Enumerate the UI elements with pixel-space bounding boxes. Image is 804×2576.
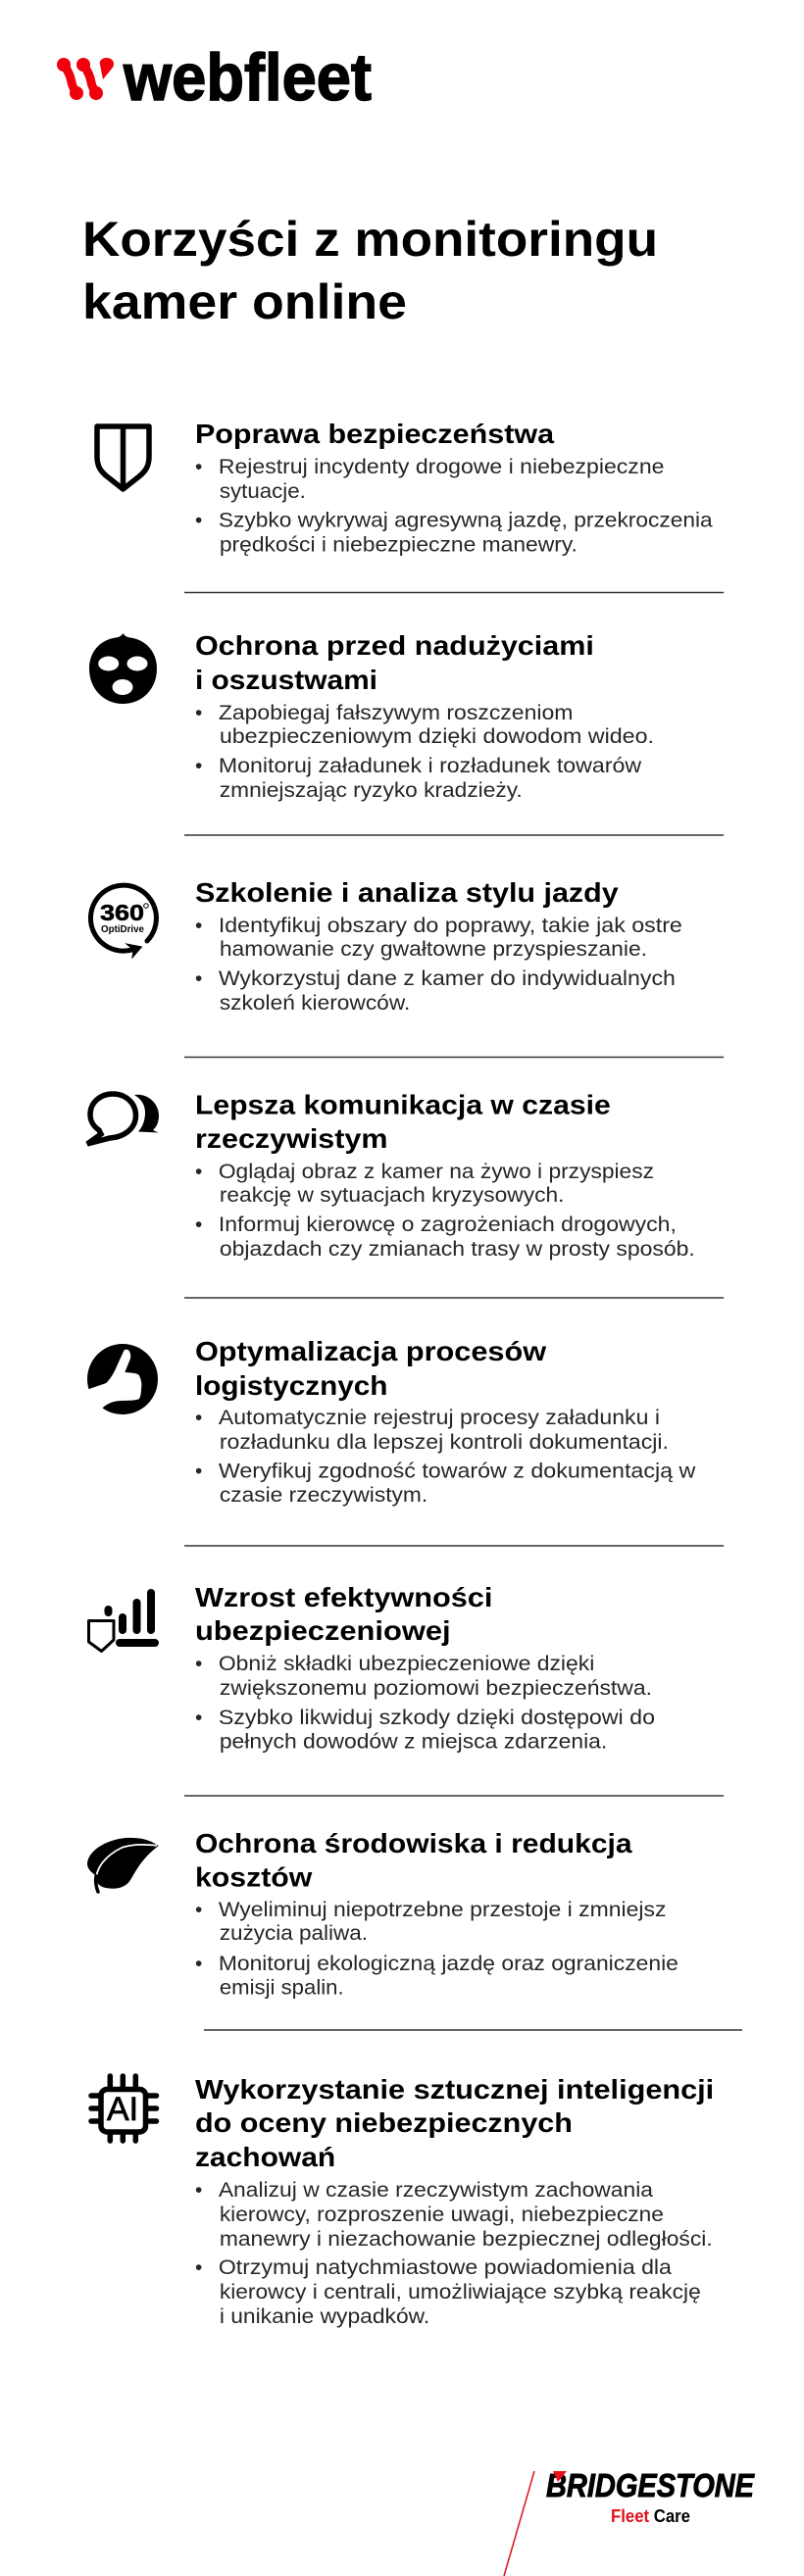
- bullet list: •: [195, 1407, 202, 1429]
- heading: Poprawa bezpieczeństwa: [195, 419, 555, 449]
- bullet list: •: [195, 967, 202, 990]
- panel: wzrost efektywności ubezpieczeniowej: [88, 1582, 655, 1754]
- icon: leaf: [87, 1838, 159, 1892]
- panel: optymalizacja procesów: [78, 1336, 696, 1507]
- icon: 360 OptiDrive: [90, 885, 156, 958]
- heading: ubezpieczeniowej: [195, 1615, 451, 1646]
- heading: [195, 2074, 714, 2172]
- icon: thumbs up: [78, 1344, 158, 1417]
- bullet list: czasie rzeczywistym.: [220, 1484, 427, 1507]
- panel: poprawa bezpieczeństwa: [97, 419, 713, 557]
- bullet list: Weryfikuj zgodność towarów z dokumentacją w: [219, 1460, 696, 1483]
- heading: Lepsza komunikacja w czasie: [195, 1089, 611, 1120]
- bullet list: Wyeliminuj niepotrzebne przestoje i zmniejsz: [219, 1899, 666, 1921]
- bullet list: •: [195, 1653, 202, 1675]
- heading: [195, 1828, 632, 1893]
- bullet list: reakcję w sytuacjach kryzysowych.: [220, 1184, 564, 1207]
- heading: Optymalizacja procesów: [195, 1336, 546, 1366]
- panel: ochrona środowiska: [87, 1828, 678, 2000]
- icon: mask: [89, 633, 157, 704]
- bullet list: Otrzymuj natychmiastowe powiadomienia dla: [219, 2256, 672, 2279]
- bullet list: Oglądaj obraz z kamer na żywo i przyspiesz: [219, 1161, 654, 1183]
- heading: zachowań: [195, 2142, 335, 2172]
- bullet list: zmniejszając ryzyko kradzieży.: [220, 779, 523, 802]
- bullet list: •: [195, 1460, 202, 1483]
- bullet list: [195, 456, 713, 557]
- logo: webfleet: [57, 40, 372, 115]
- bullet list: szkoleń kierowców.: [220, 992, 410, 1015]
- bullet list: •: [195, 915, 202, 937]
- logo: Bridgestone Fleet Care: [504, 2467, 755, 2576]
- bullet list: sytuacje.: [220, 480, 306, 503]
- bullet list: rozładunku dla lepszej kontroli dokumentacji.: [220, 1431, 669, 1454]
- heading: [195, 1582, 492, 1646]
- bullet list: •: [195, 456, 202, 478]
- bullet list: ubezpieczeniowym dzięki dowodom wideo.: [220, 725, 654, 748]
- bullet list: kierowcy i centrali, umożliwiające szybką reakcję: [220, 2281, 701, 2304]
- bullet list: Wykorzystuj dane z kamer do indywidualnych: [219, 967, 676, 990]
- bullet list: •: [195, 1899, 202, 1921]
- panel: sztuczna inteligencja: [91, 2074, 714, 2328]
- icon: webfleet red mark: [57, 58, 114, 100]
- icon: shield: [97, 426, 149, 489]
- bullet list: Monitoruj ekologiczną jazdę oraz ograniczenie: [219, 1953, 678, 1975]
- logo: Bridgestone Fleet Care: Fleet Care: [611, 2506, 690, 2526]
- bullet list: Analizuj w czasie rzeczywistym zachowania: [219, 2179, 653, 2202]
- bullet list: Obniż składki ubezpieczeniowe dzięki: [219, 1653, 594, 1675]
- heading: Ochrona przed nadużyciami: [195, 630, 594, 661]
- bullet list: zużycia paliwa.: [220, 1922, 368, 1945]
- icon: 360 OptiDrive: OptiDrive: [101, 924, 144, 935]
- bullet list: •: [195, 702, 202, 724]
- bullet list: [195, 1899, 678, 2000]
- bullet list: •: [195, 1214, 202, 1236]
- title: [82, 212, 658, 329]
- bullet list: i unikanie wypadków.: [220, 2305, 429, 2328]
- heading: Wzrost efektywności: [195, 1582, 492, 1612]
- panel: lepsza komunikacja: [87, 1089, 695, 1261]
- icon: AI chip: AI: [107, 2091, 138, 2128]
- heading: [195, 1336, 546, 1401]
- bullet list: •: [195, 755, 202, 777]
- panel: ochrona przed nadużyciami: [89, 630, 654, 802]
- bullet list: Rejestruj incydenty drogowe i niebezpieczne: [219, 456, 664, 478]
- bullet list: •: [195, 509, 202, 532]
- heading: logistycznych: [195, 1370, 387, 1401]
- bullet list: hamowanie czy gwałtowne przyspieszanie.: [220, 938, 647, 961]
- heading: rzeczywistym: [195, 1123, 387, 1154]
- bullet list: •: [195, 1161, 202, 1183]
- bullet list: Automatycznie rejestruj procesy załadunku i: [219, 1407, 660, 1429]
- bullet list: Zapobiegaj fałszywym roszczeniom: [219, 702, 573, 724]
- bullet list: [195, 702, 654, 802]
- bullet list: [195, 1161, 695, 1261]
- heading: [195, 1089, 611, 1154]
- bullet list: Monitoruj załadunek i rozładunek towarów: [219, 755, 642, 777]
- heading: Ochrona środowiska i redukcja: [195, 1828, 632, 1858]
- bullet list: Szybko wykrywaj agresywną jazdę, przekroczenia: [219, 509, 713, 532]
- heading: do oceny niebezpiecznych: [195, 2107, 573, 2138]
- bullet list: prędkości i niebezpieczne manewry.: [220, 533, 578, 557]
- icon: chat bubbles: [87, 1094, 159, 1144]
- bullet list: Informuj kierowcę o zagrożeniach drogowych,: [219, 1214, 677, 1236]
- bullet list: objazdach czy zmianach trasy w prosty sposób.: [220, 1238, 695, 1261]
- title: Korzyści z monitoringu: [82, 212, 658, 267]
- heading: Wykorzystanie sztucznej inteligencji: [195, 2074, 714, 2105]
- bullet list: Szybko likwiduj szkody dzięki dostępowi do: [219, 1707, 655, 1729]
- bullet list: [195, 1407, 696, 1507]
- heading: i oszustwami: [195, 665, 377, 695]
- bullet list: pełnych dowodów z miejsca zdarzenia.: [220, 1730, 607, 1754]
- logo: Bridgestone Fleet Care: BRIDGESTONE: [546, 2467, 755, 2503]
- bullet list: emisji spalin.: [220, 1976, 344, 2000]
- bullet list: kierowcy, rozproszenie uwagi, niebezpieczne: [220, 2204, 664, 2226]
- bullet list: Identyfikuj obszary do poprawy, takie jak ostre: [219, 915, 682, 937]
- bullet list: [195, 1653, 655, 1754]
- bullet list: •: [195, 2256, 202, 2279]
- bullet list: manewry i niezachowanie bezpiecznej odległości.: [220, 2228, 713, 2251]
- heading: Szkolenie i analiza stylu jazdy: [195, 877, 619, 908]
- icon: 360 OptiDrive: 360: [100, 900, 144, 925]
- icon: shield and bars: [88, 1589, 159, 1651]
- heading: kosztów: [195, 1861, 313, 1893]
- title: kamer online: [82, 274, 407, 329]
- heading: [195, 630, 594, 695]
- bullet list: zwiększonemu poziomowi bezpieczeństwa.: [220, 1677, 652, 1700]
- bullet list: •: [195, 1707, 202, 1729]
- panel: szkolenie i analiza stylu jazdy: [90, 877, 682, 1015]
- bullet list: [195, 2179, 713, 2328]
- wordmark: webfleet: [123, 40, 372, 115]
- bullet list: •: [195, 1953, 202, 1975]
- icon: AI chip: [91, 2076, 157, 2141]
- bullet list: [195, 915, 682, 1015]
- bullet list: •: [195, 2179, 202, 2202]
